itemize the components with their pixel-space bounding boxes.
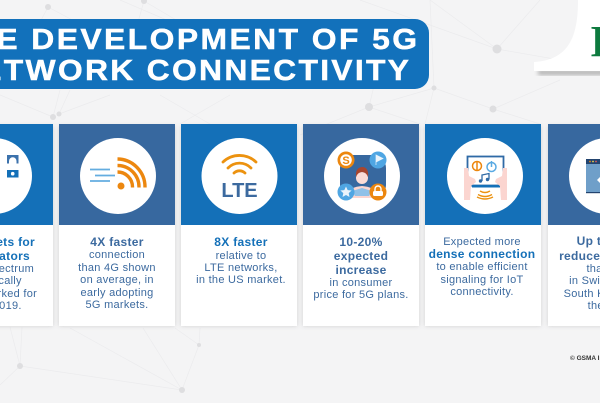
- title banner: [0, 19, 429, 89]
- card 2 text: early adopting: [80, 287, 154, 299]
- card 5 text: Expected more: [443, 236, 521, 248]
- icon: LTE signal: LTE: [221, 180, 258, 202]
- card 2 text: on average, in: [80, 274, 154, 286]
- card 4: expected increase: [303, 124, 419, 326]
- icon: LTE signal: [202, 138, 278, 214]
- card 6: reduced latency: [548, 124, 600, 326]
- card 5 text: dense connection: [429, 247, 535, 261]
- card 5 text: to enable efficient: [436, 261, 528, 273]
- icon: fast signal: [80, 138, 156, 214]
- card 3 text: in the US market.: [196, 274, 286, 286]
- card 3 text: LTE networks,: [204, 262, 278, 274]
- icon: consumer with badges: [324, 138, 400, 214]
- card 2 text: 5G markets.: [86, 299, 148, 311]
- card 2 text: 4X faster: [90, 235, 144, 249]
- card 2 text: than 4G shown: [78, 262, 156, 274]
- card 4 text: in consumer: [330, 277, 393, 289]
- card 5 text: [429, 236, 535, 298]
- card 2: 4X faster: [59, 124, 175, 326]
- card 2 text: [78, 235, 156, 311]
- logo tab: [534, 0, 600, 75]
- card 3 text: relative to: [216, 250, 266, 262]
- card 5 text: signaling for IoT: [440, 274, 524, 286]
- icon: padlock: [0, 138, 32, 214]
- icon: tablet with hands: [447, 138, 523, 214]
- card 1: markets for operators: [0, 124, 53, 326]
- card 3 text: 8X faster: [214, 235, 268, 249]
- card 3 text: [196, 235, 286, 286]
- card 5 text: connectivity.: [450, 286, 514, 298]
- card 4 text: [313, 235, 409, 301]
- icon: consumer with badges: S: [342, 155, 350, 167]
- card 4 text: increase: [335, 263, 387, 277]
- card 3: 8X faster: [181, 124, 297, 326]
- card 6 text: [559, 234, 600, 312]
- card 1 text: [0, 235, 37, 312]
- card 5: dense connection: [425, 124, 541, 326]
- card 2 text: connection: [89, 249, 145, 261]
- card 4 text: 10-20%: [339, 235, 383, 249]
- card 4 text: price for 5G plans.: [313, 289, 409, 301]
- title text: [0, 23, 417, 87]
- card 4 text: expected: [334, 249, 388, 263]
- icon: browser window: [569, 138, 600, 214]
